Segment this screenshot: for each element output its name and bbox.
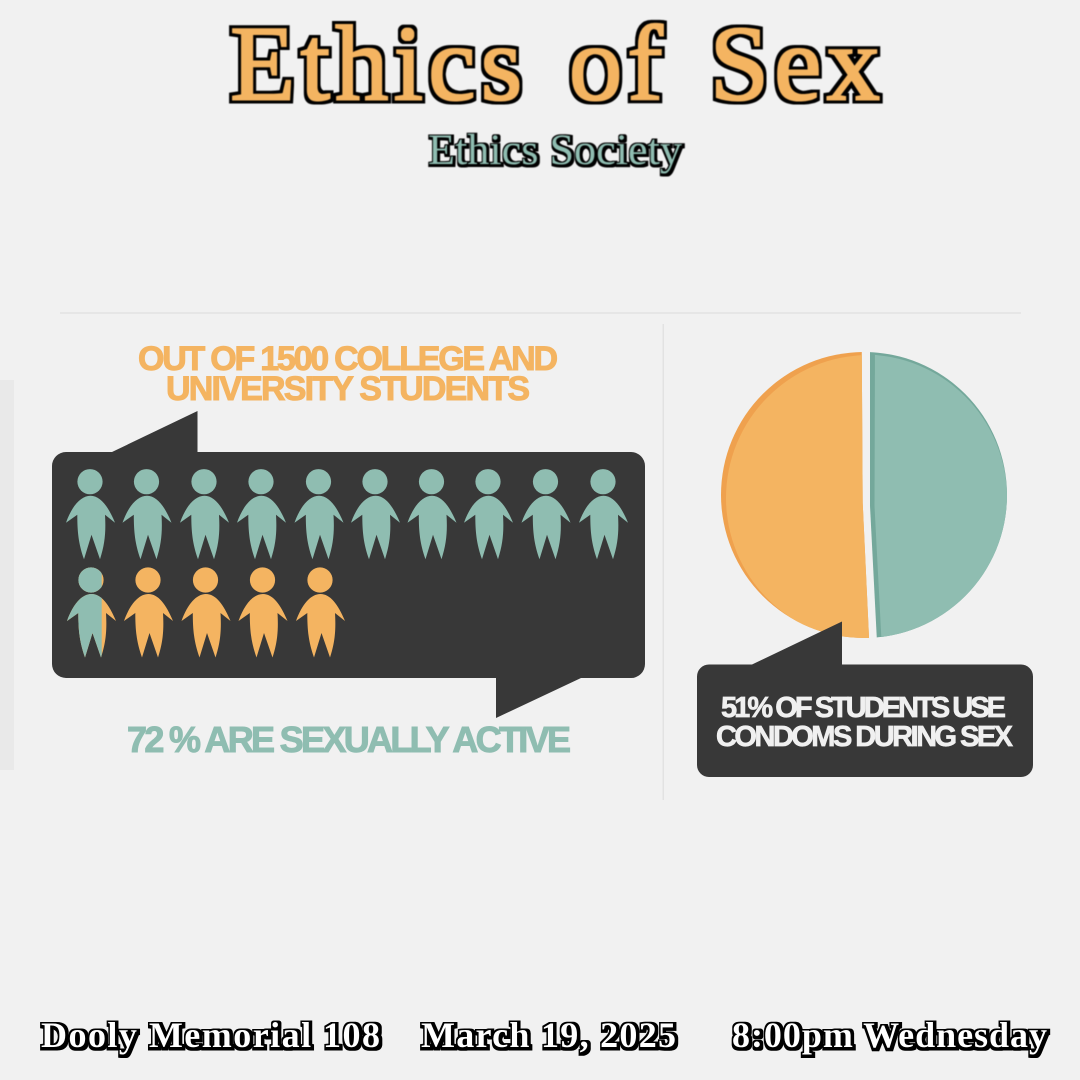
pie slice: teal xyxy=(870,352,1007,638)
panel: people speech bubble xyxy=(52,411,645,718)
pie slice: orange xyxy=(721,352,870,638)
date: March 19, 2025 xyxy=(421,1015,676,1055)
callout: condom use: 51% OF STUDENTS USE xyxy=(721,692,1006,724)
title: Ethics of Sex xyxy=(230,6,880,124)
heading: sample size xyxy=(138,340,558,408)
callout: condom use xyxy=(697,622,1033,777)
pictogram: top row, teal people xyxy=(66,469,628,559)
callout: condom use: CONDOMS DURING SEX xyxy=(716,721,1014,753)
heading: sample size: UNIVERSITY STUDENTS xyxy=(166,370,530,408)
location: Dooly Memorial 108 xyxy=(41,1015,380,1055)
time: 8:00pm Wednesday xyxy=(732,1015,1047,1055)
heading: sample size: OUT OF 1500 COLLEGE AND xyxy=(138,340,558,378)
pie chart xyxy=(721,352,1012,641)
subtitle: Ethics Society xyxy=(428,127,683,174)
heading: percent active: 72 % ARE SEXUALLY ACTIVE xyxy=(127,719,571,760)
pictogram: bottom row, orange people xyxy=(67,567,345,658)
pictogram: partially teal person xyxy=(67,567,102,658)
event details xyxy=(41,1015,1047,1055)
